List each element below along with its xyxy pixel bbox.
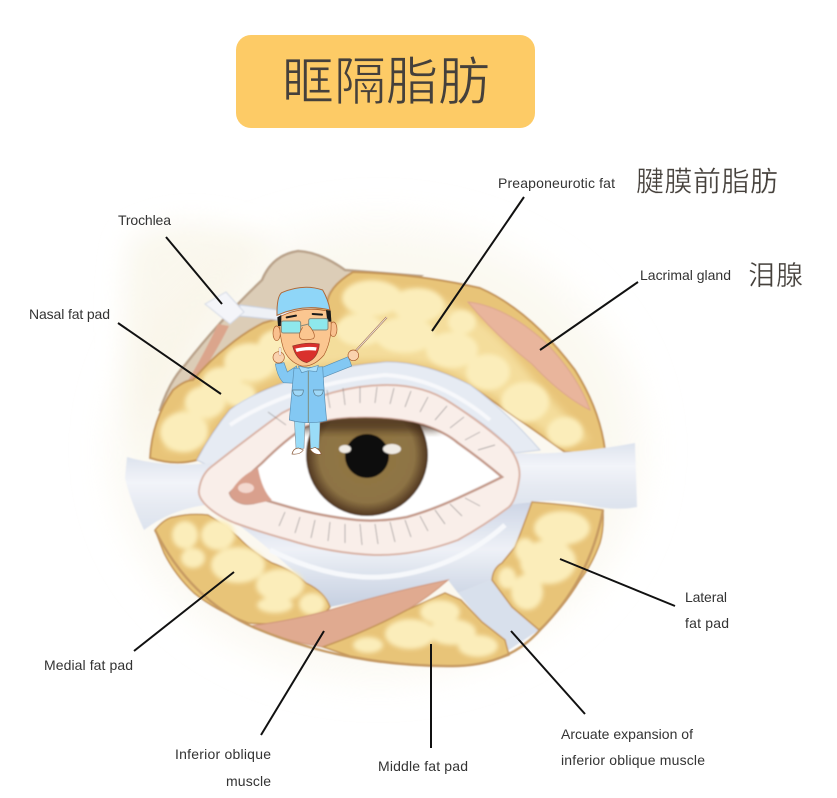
caruncle	[230, 468, 272, 504]
medial pink strip	[186, 324, 229, 385]
label: Inferior oblique muscle	[175, 746, 271, 789]
label: Arcuate expansion of inferior oblique muscle: Arcuate expansion of	[561, 726, 693, 742]
upper fat pad	[150, 272, 605, 463]
label: Lateral fat pad: Lateral	[685, 589, 727, 605]
label: Medial fat pad: Medial fat pad	[44, 657, 133, 673]
coat	[289, 367, 327, 423]
lateral lower fat pad	[492, 502, 603, 630]
label: Arcuate expansion of inferior oblique muscle	[561, 726, 705, 768]
label: Middle fat pad: Middle fat pad	[378, 758, 468, 774]
head	[273, 326, 280, 341]
doctor cartoon	[273, 287, 387, 454]
orbit rim lower edge	[155, 510, 603, 666]
inferior oblique muscle	[250, 580, 448, 647]
label: 腱膜前脂肪: 腱膜前脂肪	[636, 166, 778, 197]
label: Trochlea: Trochlea	[118, 212, 171, 228]
sclera	[230, 418, 502, 521]
label: Preaponeurotic fat: Preaponeurotic fat	[498, 175, 615, 191]
label: Lateral fat pad	[685, 589, 729, 631]
hands	[273, 352, 284, 363]
leader lines	[118, 197, 675, 748]
legs	[294, 420, 305, 448]
hair	[277, 310, 331, 326]
title	[236, 35, 535, 128]
eye anatomy illustration	[116, 224, 640, 675]
left horizontal band	[125, 457, 212, 530]
label: 泪腺: 泪腺	[748, 261, 803, 291]
hat	[277, 287, 330, 315]
lacrimal gland	[468, 302, 590, 410]
title: 眶隔脂肪	[282, 54, 490, 112]
iris and pupil	[294, 417, 442, 517]
label: Inferior oblique muscle: muscle	[226, 773, 271, 789]
glasses	[281, 319, 328, 333]
eyebrows	[287, 314, 322, 317]
arms	[275, 363, 297, 383]
label: Lacrimal gland: Lacrimal gland	[640, 267, 731, 283]
mouth	[293, 343, 319, 363]
right horizontal band	[508, 443, 637, 509]
skin haze	[116, 225, 640, 675]
collar	[298, 365, 318, 373]
pointer	[355, 317, 387, 352]
nose	[299, 326, 314, 340]
middle lower fat pad	[323, 593, 509, 666]
arcuate expansion band	[458, 580, 539, 650]
eyelashes	[268, 387, 495, 545]
trochlea	[205, 292, 292, 324]
lower fascia	[232, 502, 532, 607]
medial lower fat pad	[155, 514, 330, 624]
upper fascia	[197, 362, 540, 467]
label: Inferior oblique muscle: Inferior oblique	[175, 746, 271, 762]
label: Nasal fat pad: Nasal fat pad	[29, 306, 110, 322]
label: Arcuate expansion of inferior oblique muscle: inferior oblique muscle	[561, 752, 705, 768]
eyelid	[199, 385, 520, 555]
shoes	[292, 448, 303, 454]
label: Lateral fat pad: fat pad	[685, 615, 729, 631]
orbit recess	[160, 251, 420, 420]
